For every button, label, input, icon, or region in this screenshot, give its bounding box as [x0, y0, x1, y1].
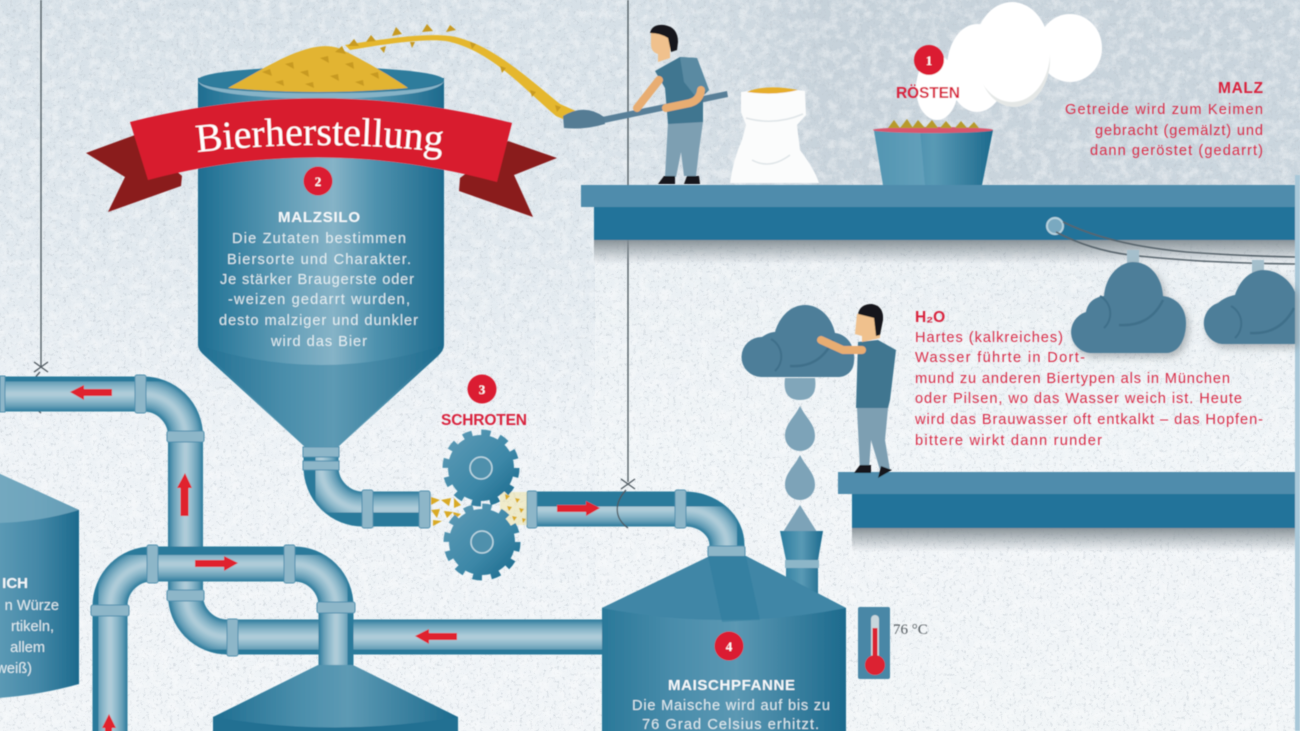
- water text: wird das Brauwasser oft entkalkt – das Hopfen-: [914, 412, 1263, 428]
- step 3 badge: 3: [479, 382, 486, 397]
- torso: [856, 340, 896, 408]
- upper shelf: [581, 185, 1295, 264]
- silo left description: n Würze: [5, 598, 59, 614]
- pipe network front: [91, 545, 355, 731]
- worker with shovel: [563, 25, 728, 184]
- malt silo description: Die Zutaten bestimmen: [232, 231, 406, 247]
- malt heading: MALZ: [1218, 80, 1264, 97]
- malt silo description: desto malziger und dunkler: [219, 313, 418, 329]
- silo left (partially cropped): [0, 473, 79, 698]
- malt silo description: -weizen gedarrt wurden,: [228, 292, 410, 308]
- worker holding cloud: [742, 304, 896, 478]
- legs: [665, 122, 703, 177]
- step 2 badge: 2: [315, 174, 321, 189]
- malt text: Getreide wird zum Keimen: [1065, 102, 1263, 118]
- grain between rollers: [431, 492, 527, 526]
- hanging thread right: [617, 0, 635, 528]
- step 1 badge: 1: [926, 53, 932, 68]
- hanging cloud 1: [1071, 250, 1186, 353]
- step 4 badge: [714, 632, 744, 660]
- pipe from mill to mash tun: [527, 490, 745, 557]
- malt text: [1065, 80, 1264, 159]
- step 2 badge: [304, 166, 332, 196]
- arm: [821, 340, 862, 350]
- malt silo heading: MALZSILO: [278, 209, 360, 226]
- malt sack: [730, 87, 819, 183]
- step 1 badge: [914, 45, 944, 75]
- shoes: [658, 176, 700, 184]
- water heading: H₂O: [915, 309, 945, 326]
- roasting bucket: [873, 119, 993, 185]
- hanging thread left: [30, 0, 48, 413]
- silo left description: [0, 598, 59, 677]
- step 1 heading: RÖSTEN: [896, 85, 960, 102]
- steam cloud: [916, 2, 1102, 120]
- step 4 badge: 4: [726, 639, 733, 654]
- malt silo description: [219, 231, 418, 350]
- water text: mund zu anderen Biertypen als in München: [915, 371, 1230, 387]
- malt silo: [198, 46, 444, 447]
- head: [855, 314, 880, 342]
- shoes: [854, 465, 892, 478]
- mash tun description: [632, 698, 830, 731]
- water text: Wasser führte in Dort-: [915, 350, 1085, 366]
- ribbon tails: [86, 135, 557, 217]
- water text: oder Pilsen, wo das Wasser weich ist. Heute: [915, 391, 1242, 407]
- mash tun: [602, 531, 846, 731]
- malt text: dann geröstet (gedarrt): [1090, 143, 1263, 159]
- pulley and ropes: [1047, 218, 1295, 264]
- torso: [655, 57, 709, 124]
- carried cloud: [742, 305, 854, 377]
- malt text: gebracht (gemälzt) und: [1095, 123, 1263, 139]
- pipe from silo to mill: [303, 447, 430, 528]
- malt stream from shovel: [335, 24, 578, 122]
- water text: Hartes (kalkreiches): [915, 330, 1063, 346]
- mash tun heading: MAISCHPFANNE: [668, 677, 795, 694]
- ribbon band: [130, 98, 512, 182]
- silo left description: allem: [10, 640, 45, 656]
- right edge strip: [1295, 175, 1300, 731]
- hair: [858, 304, 883, 336]
- thermometer: [858, 607, 890, 679]
- mash tun description: Die Maische wird auf bis zu: [632, 698, 830, 714]
- water text: [914, 309, 1263, 449]
- hanging cloud 2: [1204, 260, 1295, 344]
- legs: [857, 408, 890, 470]
- title: Bierherstellung: [194, 117, 444, 161]
- water text: bittere wirkt dann runder: [915, 433, 1102, 449]
- vent chimney: [780, 531, 823, 600]
- malt silo description: wird das Bier: [270, 334, 367, 350]
- temperature label: 76 °C: [893, 622, 928, 638]
- hair: [650, 25, 678, 52]
- milling gears: [447, 434, 516, 576]
- arms: [637, 80, 701, 108]
- silo left description: rtikeln,: [11, 619, 54, 635]
- pipe network behind: [0, 375, 607, 656]
- silo bottom (cropped): [213, 665, 458, 731]
- water drops: [783, 378, 817, 532]
- shovel: [563, 91, 728, 128]
- head: [651, 33, 670, 62]
- step 3 badge: [468, 374, 496, 404]
- malt silo description: Je stärker Braugerste oder: [220, 272, 414, 288]
- lower shelf: [838, 472, 1295, 552]
- title ribbon: [86, 98, 558, 218]
- step 3 heading: SCHROTEN: [441, 412, 527, 429]
- malt silo description: Biersorte und Charakter.: [227, 252, 411, 268]
- malt pile: [228, 46, 408, 92]
- silo left heading: ICH: [2, 575, 28, 592]
- flow arrows: [70, 385, 600, 731]
